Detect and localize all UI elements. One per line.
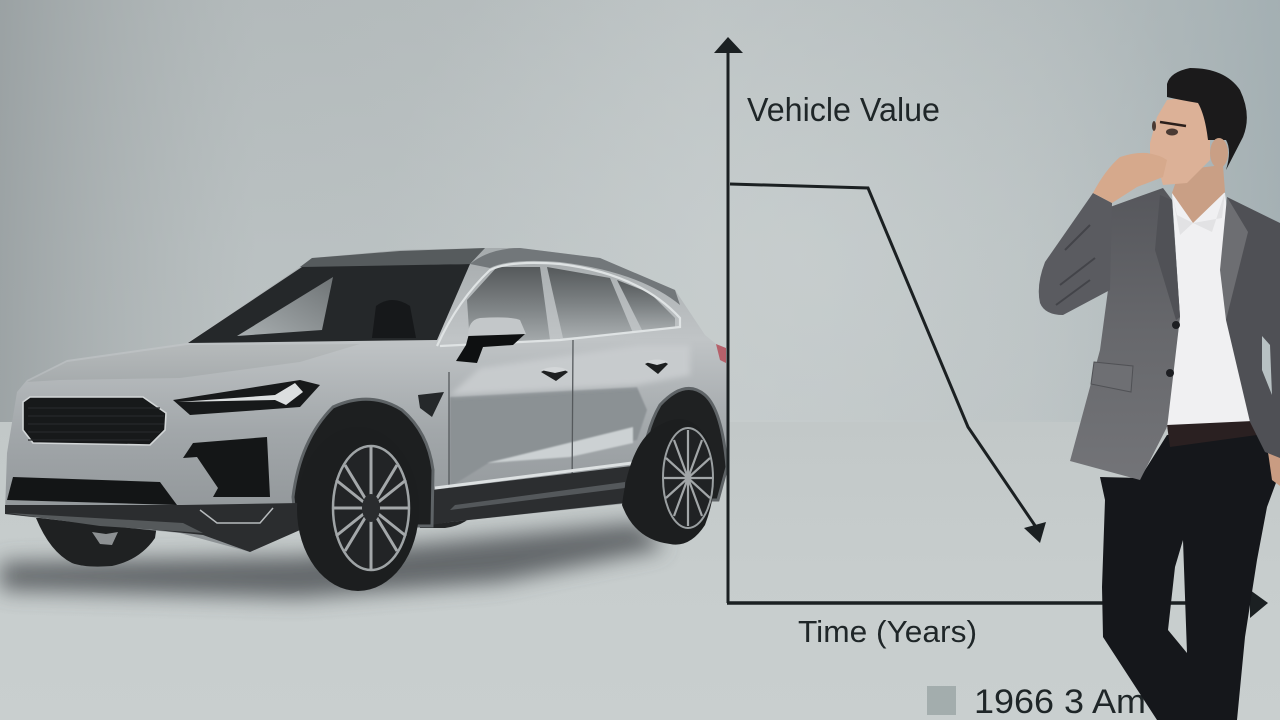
gap between arm and jacket xyxy=(1262,336,1272,395)
shirt collar xyxy=(1172,192,1225,235)
neck xyxy=(1172,165,1225,223)
sleeve creases xyxy=(1056,225,1095,305)
dark sill xyxy=(425,465,640,526)
fog trim xyxy=(200,508,273,523)
jacket buttons xyxy=(1166,321,1180,377)
upper door highlight xyxy=(450,345,690,395)
lower intake xyxy=(7,477,177,505)
hood highlight xyxy=(27,344,360,382)
roof panel xyxy=(300,248,485,268)
value line xyxy=(730,184,1038,530)
fender vent xyxy=(418,392,444,417)
hand at mouth xyxy=(1093,153,1167,203)
ear xyxy=(1210,138,1228,168)
hair xyxy=(1167,68,1247,170)
jacket sleeve xyxy=(1039,193,1112,315)
legend text: 1966 3 Am xyxy=(974,683,1146,720)
x axis label: Time (Years) xyxy=(798,614,977,649)
front wheel arch xyxy=(293,399,433,526)
chart: vehicle value falling over time xyxy=(714,37,1268,649)
legend swatch xyxy=(927,686,956,715)
jacket lapels xyxy=(1155,195,1248,320)
far front wheel xyxy=(36,518,158,567)
side air intake xyxy=(183,437,270,497)
mirror xyxy=(456,317,526,363)
jacket pocket xyxy=(1091,362,1133,392)
windshield xyxy=(188,264,470,343)
eyes and brows xyxy=(1152,121,1186,136)
windshield light reflection xyxy=(237,277,333,336)
quarter window xyxy=(617,280,675,332)
door highlight xyxy=(487,427,633,463)
face xyxy=(1150,99,1210,185)
illustration: silver SUV xyxy=(5,248,728,591)
bumper lip xyxy=(8,513,203,533)
legend xyxy=(927,683,1146,720)
door shaded panel xyxy=(450,387,647,487)
door seams xyxy=(449,340,573,505)
front side window xyxy=(467,267,550,345)
y axis label: Vehicle Value xyxy=(747,91,940,128)
right hand xyxy=(1268,452,1280,486)
rear wheel xyxy=(622,419,714,545)
y axis arrowhead xyxy=(714,37,743,53)
x axis arrowhead xyxy=(1250,590,1268,618)
far rear wheel underside xyxy=(415,505,480,528)
rear wheel arch xyxy=(640,388,727,500)
window chrome trim xyxy=(437,263,680,346)
tail light xyxy=(716,344,726,363)
car body shell xyxy=(5,248,728,552)
value line arrowhead xyxy=(1024,522,1046,543)
seat silhouette xyxy=(372,300,416,338)
grille mesh xyxy=(28,408,164,440)
illustration: thoughtful man xyxy=(1039,68,1280,720)
front wheel xyxy=(297,427,419,591)
shirt xyxy=(1166,193,1253,428)
belt xyxy=(1167,421,1257,447)
front lower bumper xyxy=(5,503,300,552)
front grille xyxy=(23,397,166,445)
jacket left panel xyxy=(1070,188,1180,480)
car shadow xyxy=(0,522,665,598)
jacket right panel xyxy=(1226,197,1280,458)
headlight xyxy=(173,380,320,415)
sill reflection xyxy=(450,482,625,510)
door handles xyxy=(541,360,668,381)
rear roof rail xyxy=(470,248,680,305)
y axis xyxy=(726,50,730,603)
trousers xyxy=(1100,425,1277,720)
rear side window xyxy=(547,267,633,338)
chrome sill line xyxy=(435,462,640,488)
x axis xyxy=(727,601,1255,605)
